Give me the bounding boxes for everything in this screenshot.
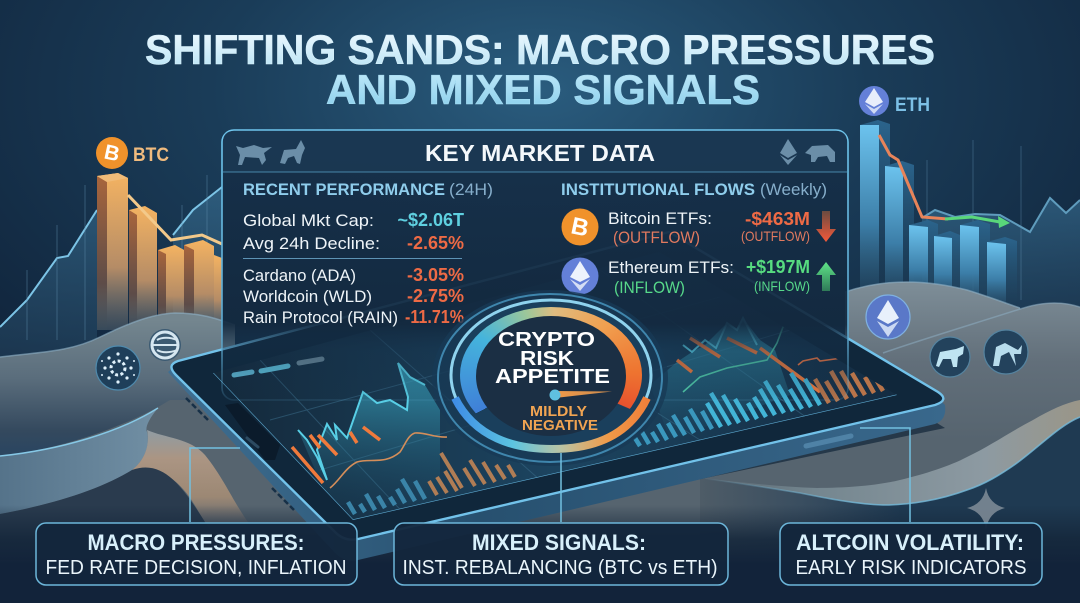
recent performance column: Cardano (ADA) xyxy=(243,266,356,285)
connector: mixed signals xyxy=(560,453,562,522)
recent performance column: -11.71% xyxy=(405,307,464,327)
title: SHIFTING SANDS: MACRO PRESSURES xyxy=(145,26,935,73)
icon: bitcoin coin: B xyxy=(569,212,591,242)
gauge title xyxy=(495,329,610,388)
recent performance column: RECENT PERFORMANCE xyxy=(243,180,445,199)
connector: macro pressures xyxy=(190,448,240,522)
gauge face xyxy=(476,316,626,436)
callout: mixed signals: MIXED SIGNALS: xyxy=(472,530,646,555)
institutional flows column: Ethereum ETFs: xyxy=(608,258,734,277)
callout: altcoin volatility xyxy=(780,523,1042,585)
gauge: crypto risk appetite xyxy=(432,290,668,466)
callout: macro pressures: MACRO PRESSURES: xyxy=(88,530,304,555)
gauge status: NEGATIVE xyxy=(522,417,598,434)
recent performance column: Global Mkt Cap: xyxy=(243,211,374,230)
callout: mixed signals: INST. REBALANCING (BTC vs ETH) xyxy=(402,557,718,579)
BTC label xyxy=(96,137,169,169)
chart: orange candles xyxy=(292,338,820,483)
BTC bar chart xyxy=(97,173,222,330)
recent performance column: Worldcoin (WLD) xyxy=(243,287,372,306)
callout: mixed signals xyxy=(394,523,728,585)
icon: ethereum coin on sand xyxy=(866,295,910,339)
left background line chart xyxy=(0,175,222,360)
recent performance column: (24H) xyxy=(449,180,493,199)
icon: green up arrow xyxy=(816,262,836,291)
recent performance column: ~$2.06T xyxy=(397,210,464,230)
gauge title: APPETITE xyxy=(495,366,610,388)
recent performance column: -2.65% xyxy=(407,233,464,253)
chart: blue volume bars xyxy=(348,373,820,514)
chart: orange volume bars xyxy=(429,453,515,495)
institutional flows column: (OUTFLOW) xyxy=(613,228,700,247)
recent performance column xyxy=(243,180,493,327)
institutional flows column: +$197M xyxy=(746,257,810,277)
icon: bitcoin coin xyxy=(562,208,598,246)
title xyxy=(145,26,935,113)
institutional flows column: (INFLOW) xyxy=(754,278,810,294)
right background line chart xyxy=(922,140,1080,320)
icon: bear on sand xyxy=(984,330,1028,374)
sand dunes xyxy=(0,282,1080,603)
icon: cardano coin xyxy=(96,346,140,390)
gauge arc xyxy=(460,307,642,443)
ETH bar chart xyxy=(860,120,1017,305)
institutional flows column: (OUTFLOW) xyxy=(741,228,810,244)
callout: macro pressures: FED RATE DECISION, INFLATION xyxy=(46,557,346,579)
institutional flows column xyxy=(561,180,836,297)
icon: ethereum and bear silhouettes xyxy=(780,139,835,165)
gauge status: MILDLY xyxy=(530,403,587,420)
institutional flows column: (INFLOW) xyxy=(614,278,685,297)
BTC label: BTC xyxy=(133,145,169,166)
institutional flows column: Bitcoin ETFs: xyxy=(608,209,712,228)
panel heading: KEY MARKET DATA xyxy=(425,140,655,166)
institutional flows column: INSTITUTIONAL FLOWS xyxy=(561,180,755,199)
gauge needle xyxy=(550,390,612,400)
icon: bull silhouettes xyxy=(236,140,305,165)
recent performance column: Avg 24h Decline: xyxy=(243,234,380,253)
icon: red down arrow xyxy=(816,211,836,242)
recent performance column: -2.75% xyxy=(407,286,464,306)
ETH label: ETH xyxy=(895,95,930,116)
callout: altcoin volatility: ALTCOIN VOLATILITY: xyxy=(796,530,1024,555)
callout: macro pressures xyxy=(36,523,357,585)
icon: bull on sand xyxy=(930,337,970,377)
icon: worldcoin coin xyxy=(149,329,181,361)
connector: altcoin volatility xyxy=(860,428,910,522)
BTC label: B xyxy=(102,141,122,166)
chart: teal price area xyxy=(299,367,440,488)
callout: altcoin volatility: EARLY RISK INDICATORS xyxy=(796,557,1026,579)
ETH label xyxy=(859,86,930,116)
recent performance column: Rain Protocol (RAIN) xyxy=(243,308,398,327)
tablet screen with charts xyxy=(213,316,897,520)
gauge status xyxy=(522,403,598,434)
gauge title: CRYPTO xyxy=(498,329,595,351)
institutional flows column: -$463M xyxy=(745,209,810,229)
recent performance column: -3.05% xyxy=(407,265,464,285)
tablet xyxy=(168,232,945,561)
panel: key market data xyxy=(222,130,848,400)
chart: trend curves xyxy=(330,433,447,488)
title: AND MIXED SIGNALS xyxy=(326,66,760,113)
gauge title: RISK xyxy=(520,348,575,370)
institutional flows column: (Weekly) xyxy=(760,180,827,199)
icon: sparkle xyxy=(967,488,1005,529)
icon: ethereum coin xyxy=(562,258,598,294)
